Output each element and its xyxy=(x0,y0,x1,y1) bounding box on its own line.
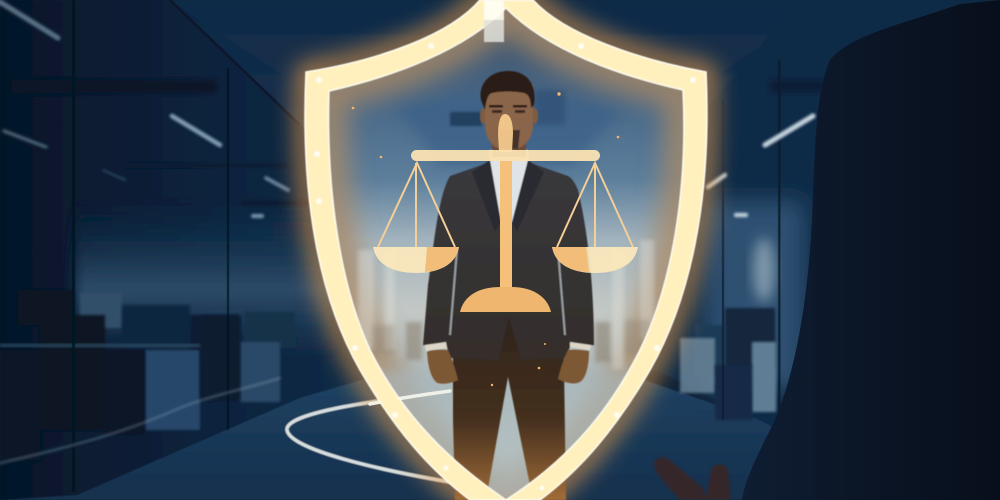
base xyxy=(460,287,551,312)
hair xyxy=(481,71,535,110)
foreground person silhouette xyxy=(654,0,1000,500)
lapels xyxy=(472,160,544,232)
cuffs xyxy=(425,342,591,351)
top tab xyxy=(484,0,504,42)
column xyxy=(500,161,512,289)
floor xyxy=(0,330,1000,500)
left pan strings xyxy=(378,163,455,247)
interior floor xyxy=(380,366,630,499)
interior warm edge glow xyxy=(329,8,684,500)
neck xyxy=(492,135,526,157)
hands xyxy=(427,350,589,384)
ceiling lights left xyxy=(0,2,288,216)
interior pale columns xyxy=(358,240,654,370)
left pan xyxy=(373,247,459,273)
right glass wall xyxy=(500,0,1000,500)
finial xyxy=(498,114,513,152)
interior furniture xyxy=(372,320,650,362)
legs xyxy=(453,300,566,500)
ceiling xyxy=(0,0,1000,300)
shield outer glow xyxy=(305,0,707,500)
beard shadow xyxy=(498,130,520,149)
ears xyxy=(480,108,538,124)
left glass wall xyxy=(0,0,500,500)
brows and eyes xyxy=(489,105,527,113)
shield dots xyxy=(314,43,696,490)
beam xyxy=(411,150,600,161)
scales of justice xyxy=(373,114,638,312)
shield band xyxy=(305,0,707,500)
shield interior scene xyxy=(328,9,684,500)
glass mullions xyxy=(72,0,300,492)
right pan strings xyxy=(557,163,633,247)
face xyxy=(484,85,533,150)
hand xyxy=(654,457,731,500)
floor curve line xyxy=(0,378,460,482)
arm gaps xyxy=(450,250,565,335)
interior ceiling xyxy=(395,95,620,165)
shirt xyxy=(488,150,530,222)
floor curve inside shield xyxy=(370,391,450,404)
man in suit xyxy=(423,71,594,500)
pan overlaps on suit xyxy=(425,247,589,272)
right pan xyxy=(552,247,638,273)
ceiling lights right xyxy=(708,116,813,215)
sparks xyxy=(352,92,619,386)
jacket xyxy=(423,162,594,360)
